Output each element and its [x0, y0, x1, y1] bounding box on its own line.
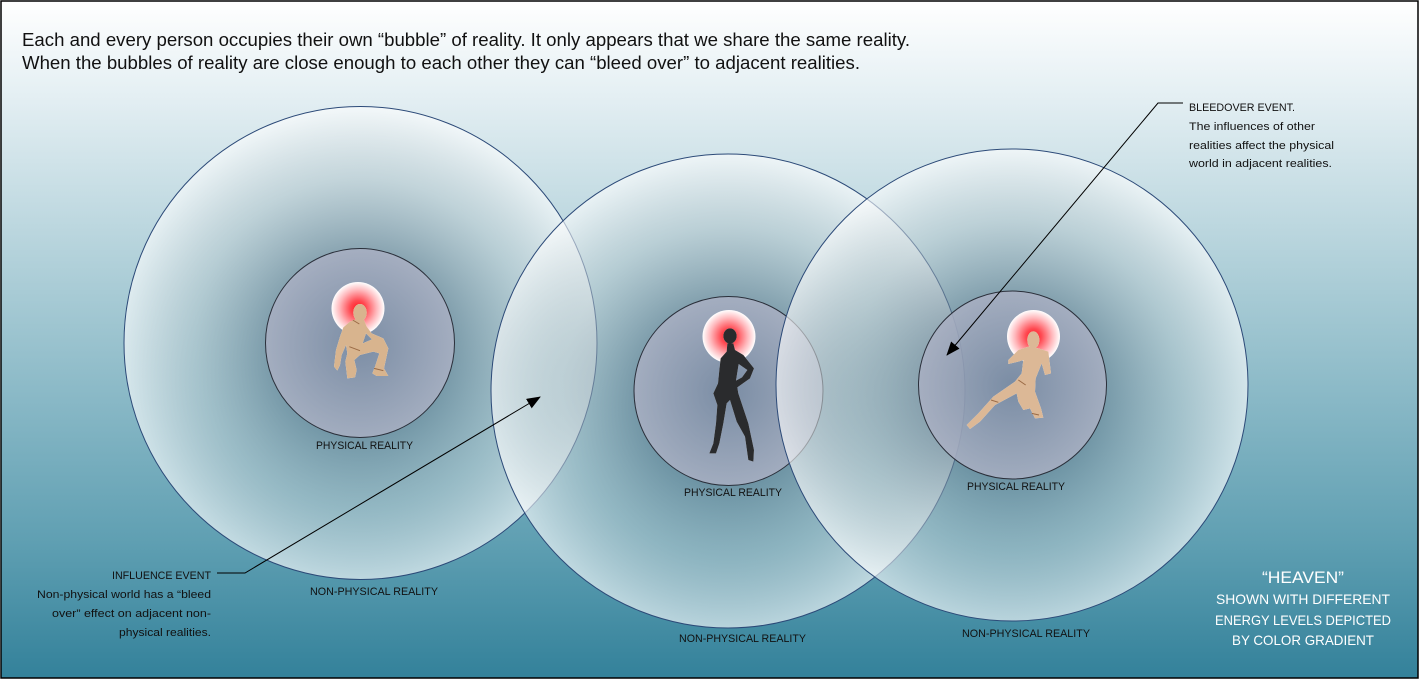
caption: heaven: “HEAVEN” — [1262, 568, 1344, 587]
callout: influence event: INFLUENCE EVENT — [112, 570, 211, 582]
physical reality labels: PHYSICAL REALITY — [684, 487, 783, 499]
callout: influence event — [37, 570, 211, 639]
figure: kneeling wooden mannequin — [334, 304, 388, 378]
callout: influence event: over” effect on adjacent non- — [52, 608, 211, 620]
non-physical reality labels — [310, 586, 1091, 645]
title — [22, 30, 910, 73]
inner bubble: center physical reality — [634, 296, 823, 486]
outer bubble: right non-physical reality — [776, 149, 1248, 621]
caption: heaven: ENERGY LEVELS DEPICTED — [1215, 612, 1391, 628]
inner bubble: left physical reality — [266, 248, 454, 438]
outer bubble: left non-physical reality — [124, 106, 597, 580]
figure: leaping wooden mannequin — [967, 331, 1051, 429]
callout: influence event: physical realities. — [119, 627, 211, 639]
energy halo: right figure — [1007, 310, 1060, 363]
energy halo: left figure — [332, 282, 384, 335]
inner bubble: right physical reality — [918, 291, 1106, 479]
physical reality labels — [316, 440, 1066, 499]
physical reality labels: PHYSICAL REALITY — [967, 481, 1066, 493]
callout: influence event: Non-physical world has a “bleed — [37, 589, 211, 601]
caption: heaven — [1215, 568, 1391, 648]
callout: bleedover event — [1188, 102, 1334, 170]
physical reality labels: PHYSICAL REALITY — [316, 440, 414, 452]
energy halo: center figure — [702, 310, 756, 363]
non-physical reality labels: NON-PHYSICAL REALITY — [679, 633, 807, 645]
callout: bleedover event: The influences of other — [1189, 121, 1315, 133]
caption: heaven: SHOWN WITH DIFFERENT — [1216, 591, 1390, 607]
arrow: influence event — [217, 397, 540, 573]
outer bubble: center non-physical reality — [491, 154, 965, 628]
title: Each and every person occupies their own “bubble” of reality. It only appears that we share the same reality. — [22, 30, 910, 50]
callout: bleedover event: BLEEDOVER EVENT. — [1189, 102, 1295, 114]
title: When the bubbles of reality are close enough to each other they can “bleed over” to adjacent realities. — [22, 53, 860, 73]
arrow: bleedover event — [947, 103, 1183, 355]
figure: standing black mannequin — [709, 328, 754, 462]
callout: bleedover event: world in adjacent realities. — [1188, 158, 1332, 170]
callout: bleedover event: realities affect the physical — [1189, 140, 1334, 152]
non-physical reality labels: NON-PHYSICAL REALITY — [310, 586, 439, 598]
caption: heaven: BY COLOR GRADIENT — [1232, 632, 1374, 648]
non-physical reality labels: NON-PHYSICAL REALITY — [962, 628, 1091, 640]
